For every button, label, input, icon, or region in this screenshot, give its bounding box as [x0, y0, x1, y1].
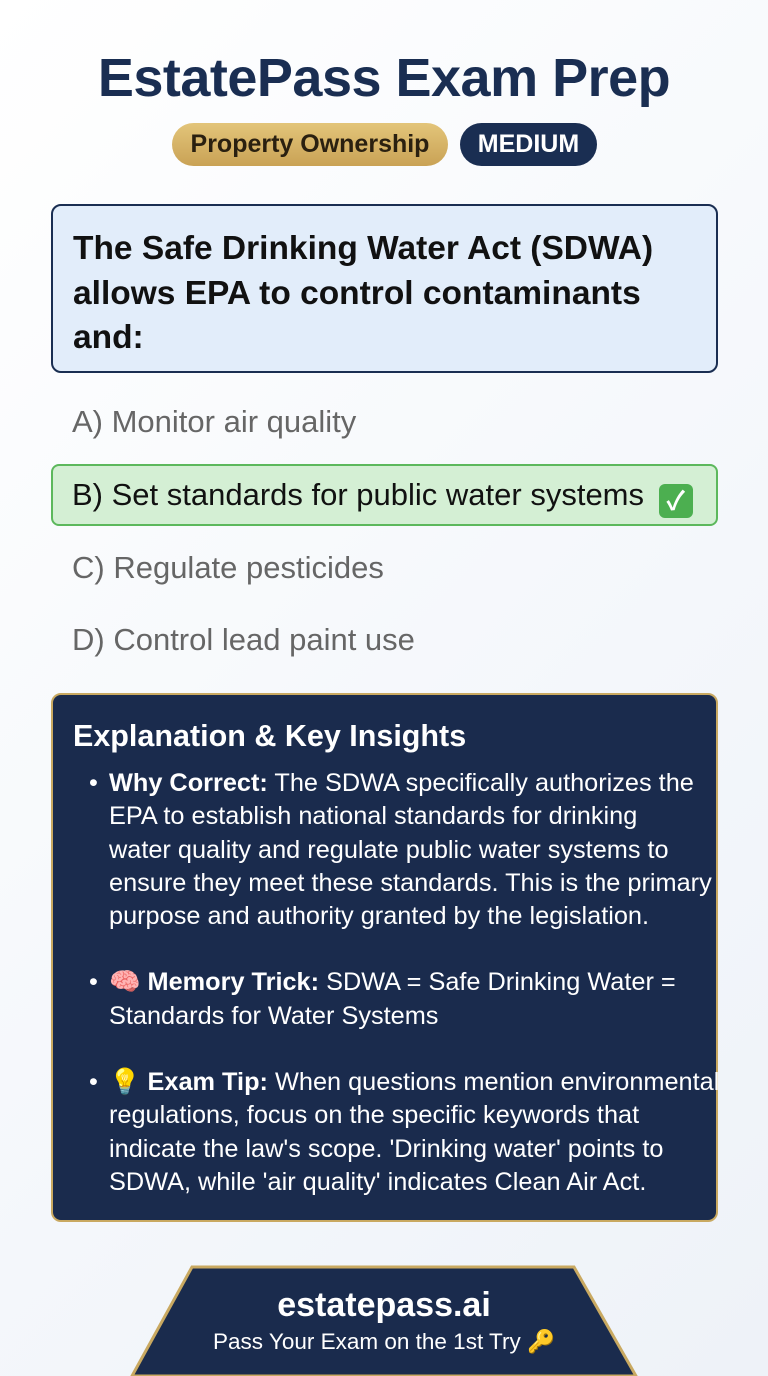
- question box: The Safe Drinking Water Act (SDWA): [73, 230, 653, 267]
- badge: difficulty: [460, 123, 597, 166]
- panel: explanation: water quality and regulate public water systems to: [109, 836, 669, 864]
- question box: [51, 204, 718, 373]
- panel: explanation: indicate the law's scope. 'Drinking water' points to: [109, 1135, 663, 1163]
- option D: D) Control lead paint use: [72, 622, 415, 657]
- explanation heading: Explanation & Key Insights: [73, 719, 466, 753]
- panel: explanation: 🧠 Memory Trick: SDWA = Safe Drinking Water =: [109, 968, 676, 996]
- panel: explanation: [51, 693, 718, 1222]
- badge: category: [172, 123, 448, 166]
- option B correct: B) Set standards for public water systems: [72, 477, 644, 512]
- question box: and:: [73, 319, 144, 356]
- panel: explanation: purpose and authority granted by the legislation.: [109, 902, 649, 930]
- option C: C) Regulate pesticides: [72, 550, 384, 585]
- badge: category: Property Ownership: [191, 130, 429, 158]
- question box: allows EPA to control contaminants: [73, 274, 641, 312]
- footer site name: estatepass.ai: [277, 1286, 491, 1324]
- title: EstatePass Exam Prep: [98, 48, 670, 108]
- footer tagline: Pass Your Exam on the 1st Try 🔑: [213, 1329, 555, 1354]
- option B correct: [51, 464, 718, 526]
- panel: explanation: 💡 Exam Tip: When questions mention environmental: [109, 1068, 719, 1096]
- panel: explanation: ensure they meet these standards. This is the primary: [109, 869, 712, 897]
- badge: difficulty: MEDIUM: [478, 130, 579, 158]
- option B correct: ✓: [666, 486, 685, 516]
- panel: explanation: Why Correct: The SDWA specifically authorizes the: [109, 769, 694, 797]
- panel: explanation: SDWA, while 'air quality' indicates Clean Air Act.: [109, 1168, 646, 1196]
- panel: explanation: Standards for Water Systems: [109, 1002, 438, 1030]
- panel: explanation: regulations, focus on the specific keywords that: [109, 1101, 639, 1129]
- panel: explanation: EPA to establish national standards for drinking: [109, 802, 637, 830]
- footer banner: [130, 1266, 638, 1376]
- option A: A) Monitor air quality: [72, 404, 356, 439]
